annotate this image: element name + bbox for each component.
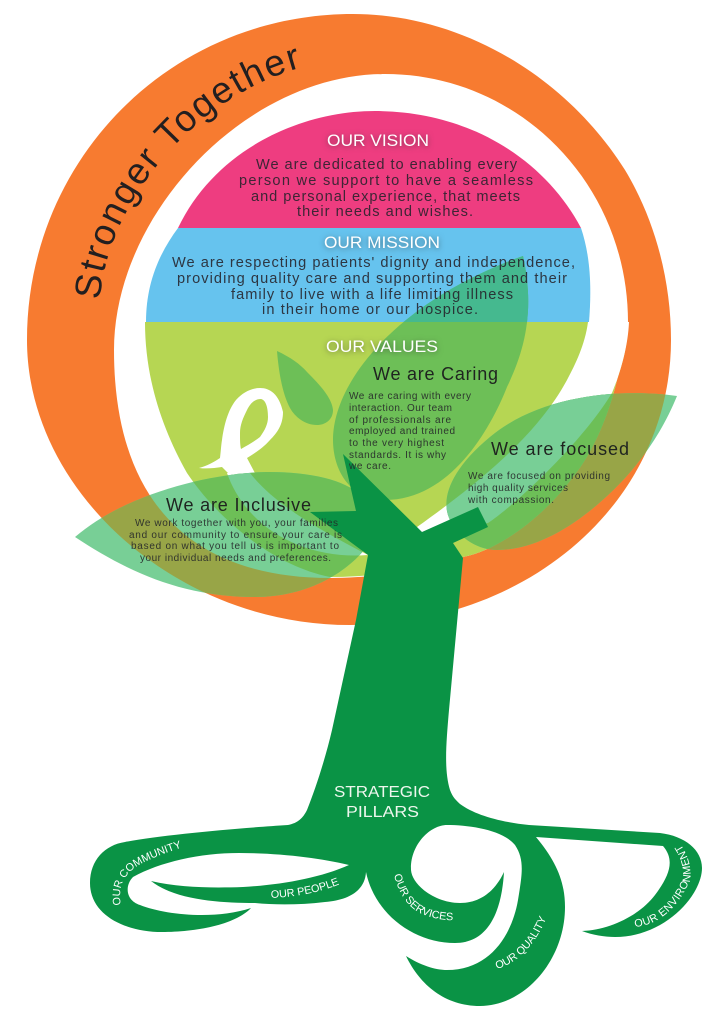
root label: our services: OUR SERVICES [394, 874, 453, 920]
text block: mission: We are respecting patients' dignity and independence, [172, 255, 575, 271]
heading: we are focused: We are focused [491, 439, 629, 459]
small leaf [277, 351, 333, 425]
text block: mission: family to live with a life limiting illness [231, 287, 513, 303]
text block: inclusive: based on what you tell us is important to [131, 541, 339, 552]
text block: inclusive: your individual needs and preferences. [140, 553, 331, 564]
heading: we are caring: We are Caring [373, 364, 498, 384]
text block: mission: providing quality care and supporting them and their [177, 271, 567, 287]
panel: our values disc [145, 322, 629, 577]
heading: our vision: OUR VISION [327, 131, 429, 150]
text block: mission: in their home or our hospice. [262, 302, 478, 318]
text block: vision: person we support to have a seamless [239, 173, 533, 189]
panel: our mission band [146, 228, 590, 322]
text block: caring: we care. [348, 461, 391, 472]
root label: our community: OUR COMMUNITY [112, 840, 180, 905]
root label: our quality: OUR QUALITY [496, 915, 546, 968]
text block: focused: high quality services [468, 483, 568, 494]
text block: inclusive: and our community to ensure your care is [129, 530, 342, 541]
label: strategic pillars: STRATEGIC [334, 784, 430, 801]
heading: we are inclusive: We are Inclusive [166, 495, 311, 515]
caring leaf [333, 256, 528, 500]
text block: vision: We are dedicated to enabling every [256, 157, 518, 173]
focused leaf [446, 393, 677, 550]
text block: caring: to the very highest [349, 438, 444, 449]
text block: vision [239, 157, 533, 220]
text block: caring [348, 391, 471, 472]
root label: our people: OUR PEOPLE [271, 878, 339, 898]
label: strategic pillars: PILLARS [346, 804, 419, 821]
inclusive leaf [75, 472, 363, 597]
text block: focused [467, 471, 610, 506]
text block: focused: We are focused on providing [468, 471, 610, 482]
heading: our mission: OUR MISSION [324, 233, 440, 252]
panel: our vision band [178, 111, 581, 228]
heading: our values: OUR VALUES [326, 337, 438, 356]
text block: mission [172, 255, 575, 318]
text block: inclusive: We work together with you, your families [135, 518, 338, 529]
text block: caring: of professionals are [349, 415, 451, 426]
tree trunk and roots [90, 454, 702, 1006]
text block: focused: with compassion. [467, 495, 554, 506]
text block: vision: and personal experience, that meets [251, 189, 520, 205]
orange ring [27, 14, 671, 625]
title: stronger together: Stronger Together [75, 48, 296, 298]
text block: caring: employed and trained [349, 426, 455, 437]
icon: white ribbon [199, 388, 283, 475]
label: strategic pillars [334, 784, 430, 821]
text block: caring: standards. It is why [349, 450, 446, 461]
text block: caring: We are caring with every [349, 391, 471, 402]
text block: caring: interaction. Our team [349, 403, 452, 414]
root label: our environment: OUR ENVIRONMENT [634, 846, 691, 927]
text block: inclusive [129, 518, 342, 564]
text block: vision: their needs and wishes. [297, 204, 473, 220]
